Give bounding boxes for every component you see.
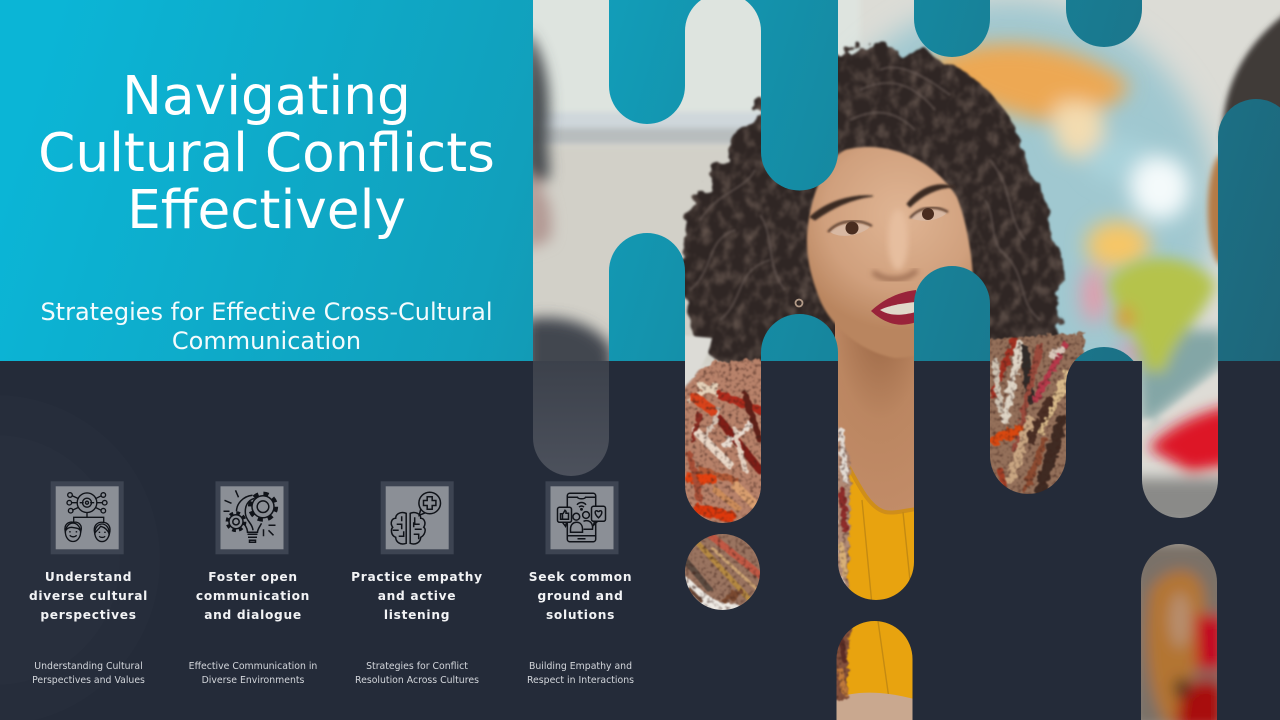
icon: smartphone with people and reactions — [546, 481, 618, 554]
title: Navigating — [122, 65, 411, 127]
blurred globe — [852, 0, 1218, 361]
subtitle: Communication — [172, 327, 361, 355]
woman: yellow blouse — [836, 465, 914, 720]
description: effective communication: Diverse Environments — [202, 674, 304, 686]
decorative faint concentric circles — [0, 395, 160, 720]
heading: practice empathy and active listening — [351, 570, 483, 622]
heading: foster open communication and dialogue: Foster open — [208, 570, 298, 584]
title: Effectively — [127, 179, 406, 241]
heading: understand diverse cultural perspectives — [29, 570, 148, 622]
blurred figure on the left — [533, 28, 609, 361]
heading: understand diverse cultural perspectives: diverse cultural — [29, 588, 148, 602]
heading: understand diverse cultural perspectives: Understand — [45, 570, 132, 584]
heading: seek common ground and solutions: ground and — [537, 588, 624, 602]
description: effective communication — [189, 660, 317, 686]
description: understanding cultural perspectives: Understanding Cultural — [34, 660, 143, 672]
woman: hair — [681, 46, 1062, 372]
woman: facial features — [810, 185, 955, 325]
subtitle — [40, 298, 493, 355]
woman: neck — [835, 322, 914, 520]
heading: understand diverse cultural perspectives: perspectives — [40, 608, 137, 622]
woman: patterned scarf — [682, 332, 1085, 700]
translucent pill over the blurred figure — [533, 361, 609, 476]
blurred foreground clothing — [1142, 372, 1218, 429]
heading: foster open communication and dialogue: and dialogue — [204, 608, 302, 622]
white wall gap beside the hair — [685, 334, 714, 389]
description: building empathy and respect: Respect in Interactions — [527, 674, 634, 686]
description: conflict resolution strategies: Resolution Across Cultures — [355, 674, 479, 686]
heading: practice empathy and active listening: Practice empathy — [351, 570, 483, 584]
icon: brain with medical speech bubble — [381, 481, 454, 554]
description: understanding cultural perspectives — [32, 660, 145, 686]
description: effective communication: Effective Communication in — [189, 660, 317, 672]
heading: seek common ground and solutions — [529, 570, 632, 622]
description: building empathy and respect: Building Empathy and — [529, 660, 632, 672]
description: understanding cultural perspectives: Perspectives and Values — [32, 674, 145, 686]
icon: cultural perspectives network with two faces — [51, 481, 124, 554]
heading: practice empathy and active listening: and active — [378, 588, 456, 602]
woman: earring — [796, 300, 802, 306]
heading: practice empathy and active listening: listening — [384, 608, 450, 622]
woman: hair highlights — [690, 67, 1040, 320]
title — [38, 65, 495, 241]
icon: lightbulb with gears — [216, 481, 288, 554]
teal title panel and pill shapes — [0, 0, 1280, 361]
description: building empathy and respect — [527, 660, 634, 686]
description: conflict resolution strategies — [355, 660, 479, 686]
title: Cultural Conflicts — [38, 122, 495, 184]
dark lower panel with pill cut-outs — [0, 361, 1280, 720]
subtitle: Strategies for Effective Cross-Cultural — [40, 298, 493, 326]
heading: foster open communication and dialogue: communication — [196, 588, 310, 602]
blurred person on the right — [1222, 10, 1280, 140]
heading: foster open communication and dialogue — [196, 570, 310, 622]
heading: seek common ground and solutions: solutions — [546, 608, 615, 622]
photo: woman in front of a globe — [520, 0, 1280, 720]
heading: seek common ground and solutions: Seek common — [529, 570, 632, 584]
description: conflict resolution strategies: Strategies for Conflict — [366, 660, 468, 672]
woman: face — [807, 147, 973, 358]
